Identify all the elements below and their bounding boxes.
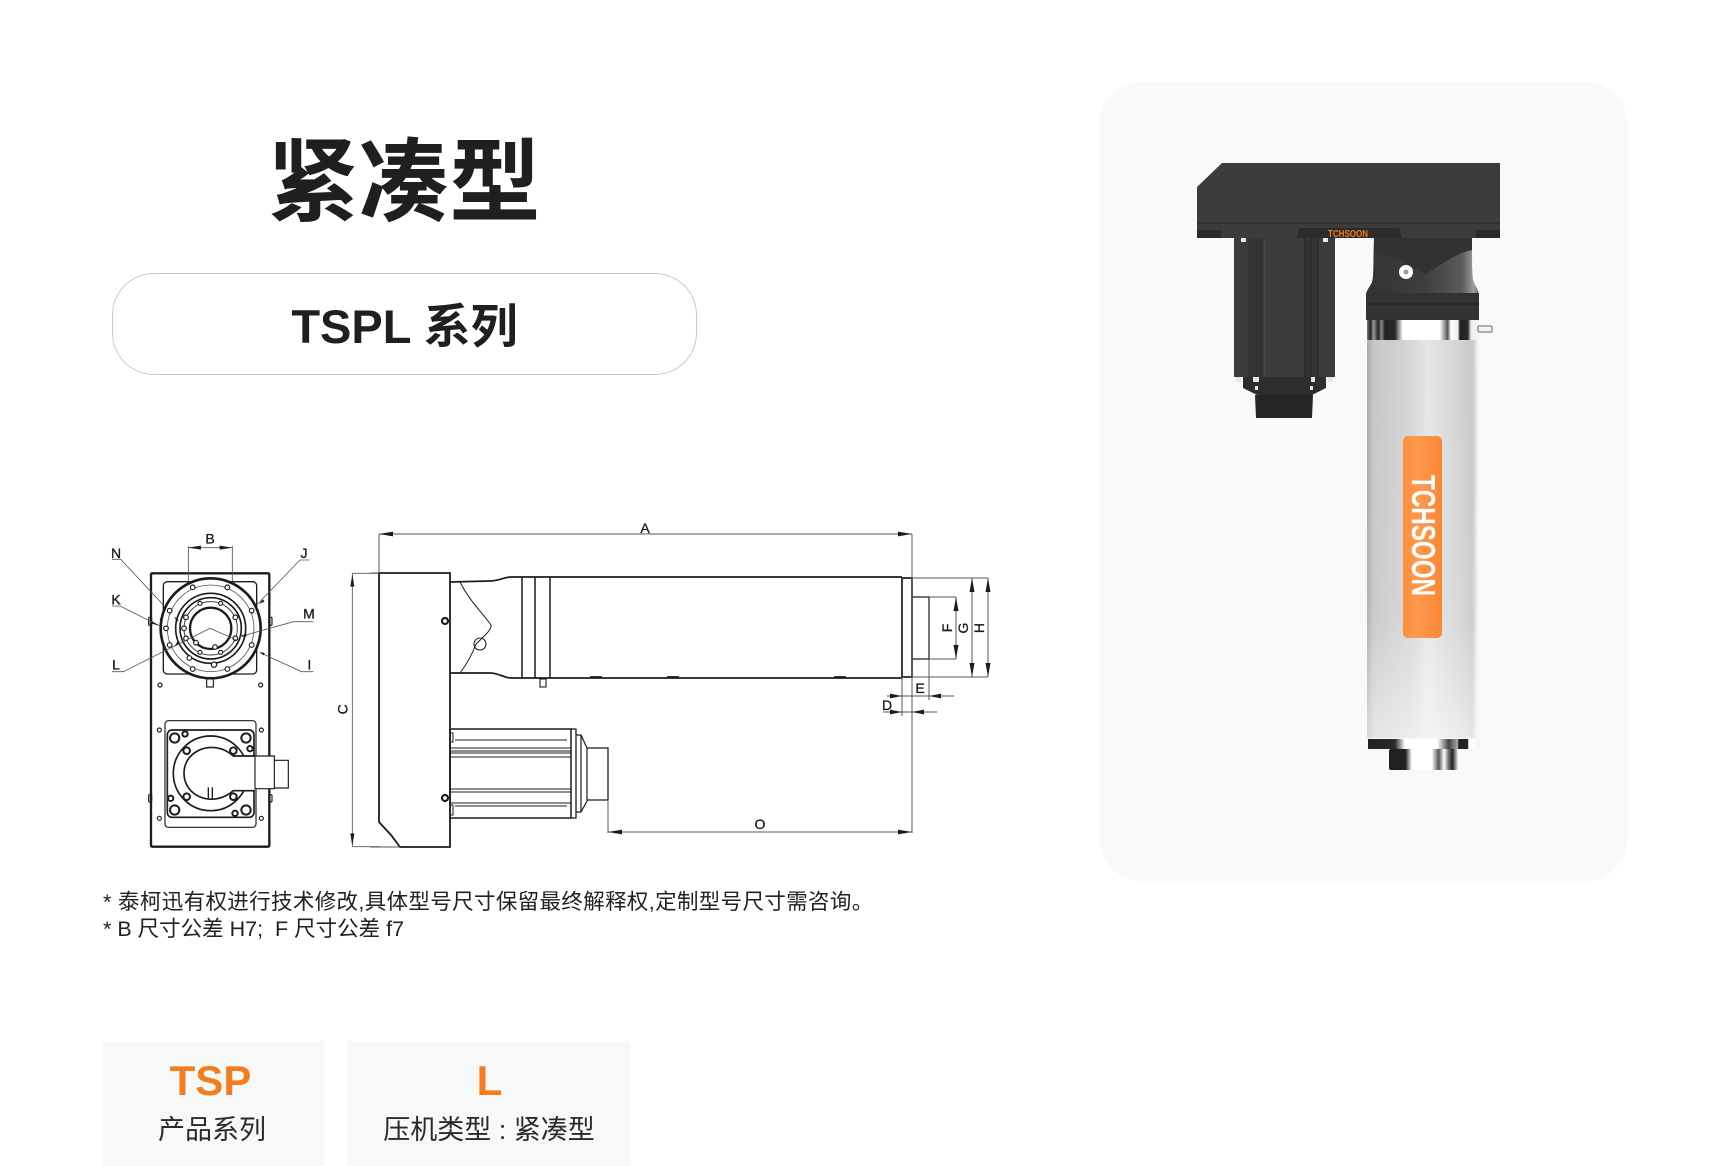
panel background xyxy=(1100,82,1628,881)
dimension letters: L xyxy=(112,656,120,672)
orange brand label xyxy=(1403,436,1442,638)
dimension letters: H xyxy=(971,623,987,633)
servo motor xyxy=(1234,238,1335,418)
dimension letters: J xyxy=(300,545,308,561)
lower motor flange xyxy=(165,721,256,827)
note: modification rights: * 泰柯迅有权进行技术修改,具体型号尺寸保留最终解释权,定制型号尺寸需咨询。 xyxy=(103,890,874,914)
dimension letters: D xyxy=(882,697,892,713)
leader lines and arrows xyxy=(112,546,380,847)
mounting holes xyxy=(149,617,272,820)
dimension letters: B xyxy=(205,531,215,547)
housing outline xyxy=(151,573,269,847)
label press type compact: 压机类型 : 紧凑型 xyxy=(383,1115,595,1145)
small key tab xyxy=(207,678,213,687)
dimension letters: M xyxy=(303,606,315,622)
dimension letters xyxy=(111,531,350,714)
title: 紧凑型 xyxy=(267,109,540,241)
dimension letters: G xyxy=(955,623,971,633)
side pin xyxy=(1478,326,1492,332)
code L: L xyxy=(477,1057,502,1104)
brand text: TCHSOON xyxy=(1405,475,1442,596)
actuator end rings xyxy=(161,578,261,678)
tube end flange xyxy=(902,578,912,677)
piston rod xyxy=(1389,749,1458,770)
dimension letters: N xyxy=(111,545,121,561)
label product series: 产品系列 xyxy=(158,1115,266,1145)
servo motor xyxy=(450,729,608,818)
side connector xyxy=(255,756,288,789)
series name: TSPL 系列 xyxy=(291,300,518,353)
code TSP: TSP xyxy=(170,1057,251,1104)
technical drawing: front view xyxy=(111,531,380,848)
dimension lines xyxy=(352,534,988,847)
code box: product series xyxy=(103,1041,324,1166)
press top plate xyxy=(1197,163,1500,240)
technical drawing: side view xyxy=(370,520,990,848)
dimension letters: O xyxy=(755,816,766,832)
dimension letters: F xyxy=(939,624,955,632)
press body block xyxy=(379,573,450,847)
chrome band xyxy=(1367,320,1479,340)
dimension letters: I xyxy=(307,656,311,672)
panel: product photo xyxy=(1197,163,1500,770)
dimension letters: A xyxy=(640,520,650,536)
note: tolerances: * B 尺寸公差 H7; F 尺寸公差 f7 xyxy=(103,916,404,940)
cylinder head xyxy=(1366,238,1479,320)
dimension arrows xyxy=(350,532,990,846)
piston rod xyxy=(912,597,929,659)
footnotes xyxy=(103,890,874,940)
cylinder tube xyxy=(1367,340,1478,738)
head screw xyxy=(1399,265,1413,279)
plate logo text: TCHSOON xyxy=(1328,228,1368,240)
dimension letters: C xyxy=(334,704,350,714)
motor end detail xyxy=(167,730,255,817)
logo plaque xyxy=(1296,228,1402,238)
series pill xyxy=(112,273,697,375)
dimension letters: K xyxy=(111,591,121,607)
dimension letters xyxy=(336,520,987,832)
bottom flange xyxy=(1368,739,1480,749)
upper flange plate xyxy=(163,582,257,674)
code box: press type xyxy=(347,1041,631,1166)
dimension letters: E xyxy=(915,680,925,696)
cylinder tube xyxy=(442,577,929,801)
